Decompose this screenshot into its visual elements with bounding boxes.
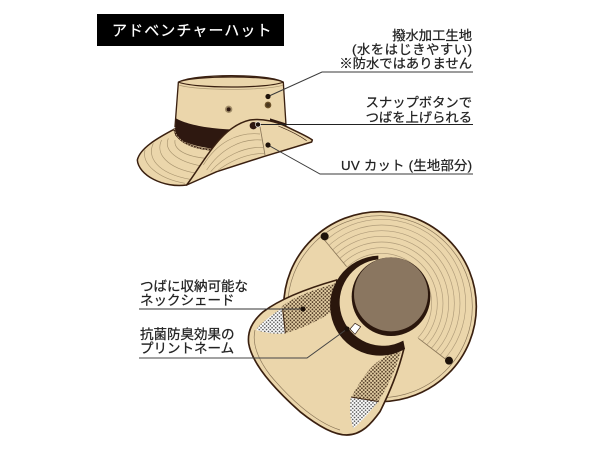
mesh panel: bottom (350, 352, 401, 428)
label: neck shade: ネックシェード (140, 293, 234, 308)
title banner: アドベンチャーハット (112, 22, 273, 40)
label: water repellent fabric: 撥水加工生地 (392, 28, 472, 43)
leader line: water repellent fabric (265, 72, 473, 99)
round brim (284, 212, 476, 402)
side view hat illustration (137, 76, 312, 186)
label: snap button (366, 95, 472, 125)
leader line: print name (139, 326, 350, 358)
title banner (97, 14, 284, 46)
leader line: UV cut (265, 142, 473, 174)
folded up brim (187, 120, 312, 185)
label: antibacterial print name (140, 327, 234, 356)
label: snap button: スナップボタンで (366, 95, 472, 110)
leader line: snap button (255, 122, 473, 127)
eyelets and snap button (225, 102, 271, 129)
label: water repellent fabric: (水をはじきやすい) (352, 42, 472, 57)
hat band (174, 118, 286, 150)
label: neck shade (140, 279, 248, 308)
label: UV cut: UV カット (生地部分) (341, 158, 472, 173)
label: water repellent fabric: ※防水ではありません (339, 56, 472, 71)
leader line: neck shade (139, 306, 306, 312)
label: snap button: つばを上げられる (366, 110, 472, 125)
label: water repellent fabric (339, 28, 472, 71)
underside view hat illustration (248, 212, 476, 435)
label: antibacterial print name: 抗菌防臭効果の (140, 327, 234, 342)
snap dots on brim (321, 232, 453, 365)
back brim (137, 128, 217, 186)
neck shade (248, 280, 404, 435)
hat crown (175, 76, 286, 132)
crown opening (330, 256, 430, 356)
mesh panel: left (256, 283, 335, 334)
label: neck shade: つばに収納可能な (140, 279, 248, 294)
label: antibacterial print name: プリントネーム (140, 341, 234, 356)
